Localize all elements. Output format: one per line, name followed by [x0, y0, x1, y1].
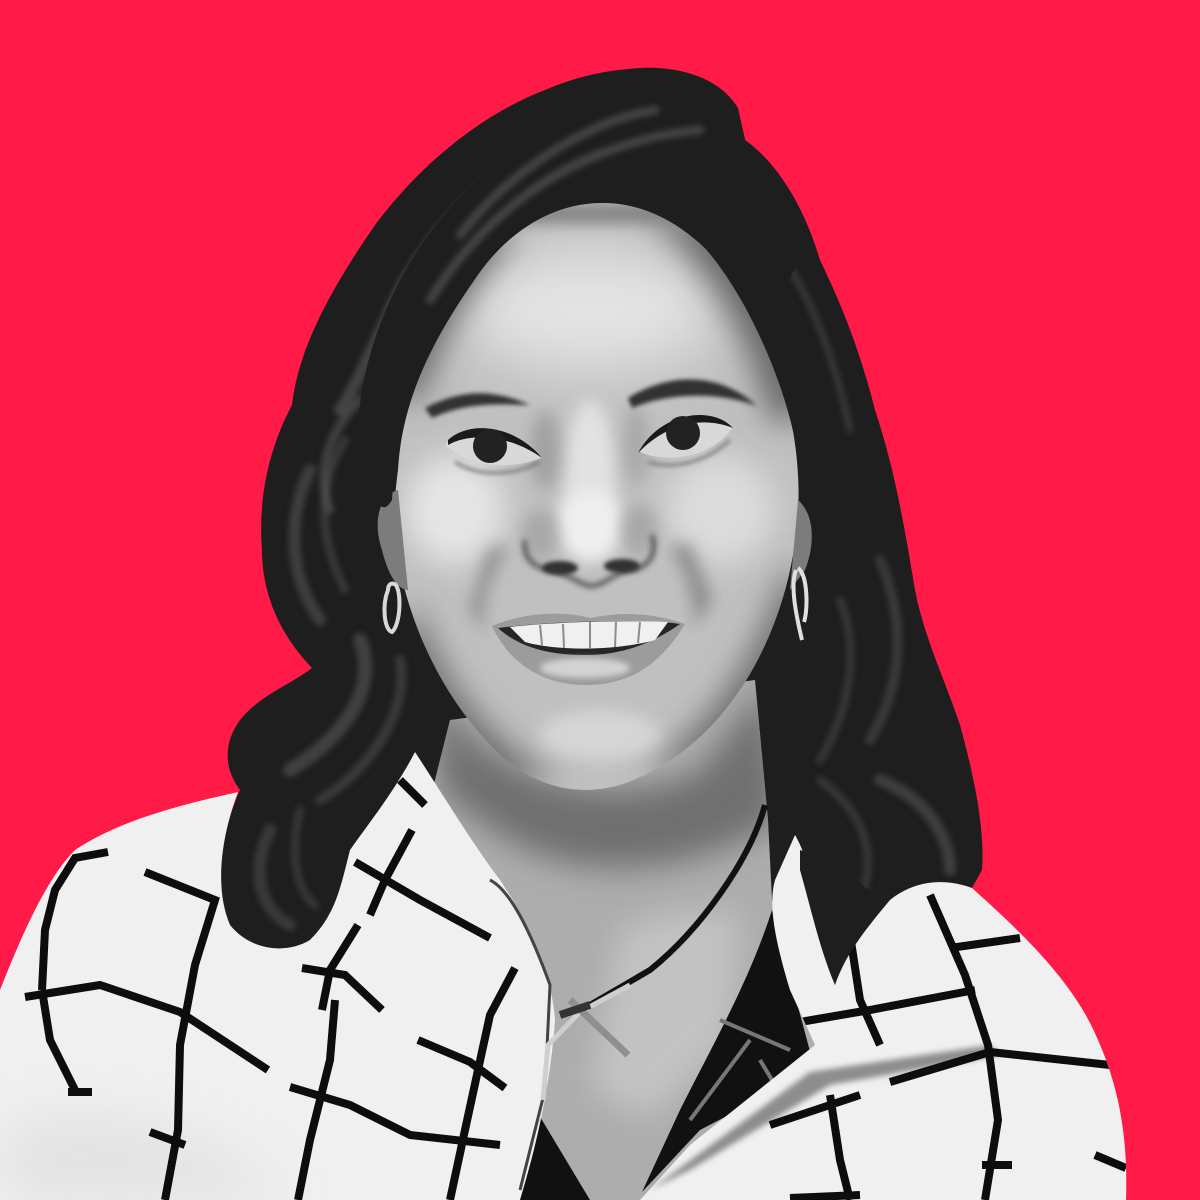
ears [378, 490, 812, 590]
left earring [385, 584, 399, 632]
jacket left check lines [25, 780, 515, 1200]
face [394, 203, 810, 790]
mouth [492, 614, 685, 685]
right earring [794, 568, 806, 640]
collar edge [490, 880, 550, 1190]
left eye [445, 428, 542, 473]
jacket right check lines [770, 895, 1126, 1200]
hair highlights [260, 105, 950, 925]
left eyebrow [425, 393, 530, 418]
necklace [543, 805, 765, 1100]
nose [522, 491, 658, 586]
right eyebrow [628, 379, 757, 408]
right eye [638, 415, 733, 465]
hair: front lock over forehead [358, 68, 820, 507]
jacket left panel [0, 752, 555, 1200]
dark top under jacket [518, 910, 815, 1200]
hair: back and sides [221, 68, 983, 985]
jacket collar fold hair overlap [800, 850, 885, 985]
jacket right panel [640, 835, 1126, 1200]
neck and chest [430, 680, 830, 1200]
face shading [460, 250, 720, 370]
